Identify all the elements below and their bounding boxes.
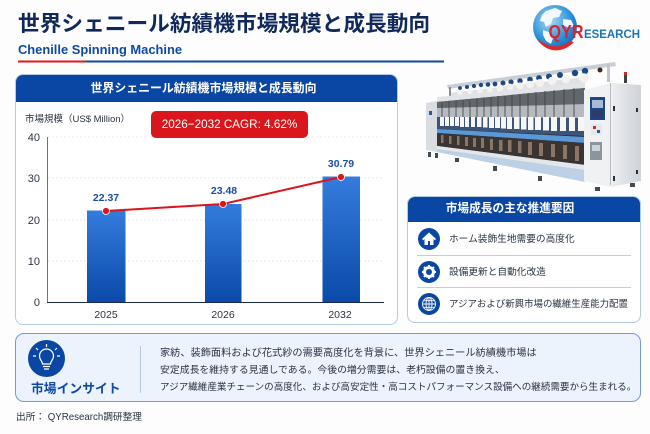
CAGR callout — [151, 111, 308, 138]
top creel — [447, 62, 616, 101]
icon: gear — [418, 261, 440, 283]
panel: market size chart — [15, 74, 398, 325]
year labels: 2025 — [94, 309, 118, 321]
CAGR trend line — [102, 174, 344, 214]
driver: automation — [418, 261, 546, 283]
guide rods — [442, 88, 574, 117]
y axis labels: 30 — [28, 173, 40, 185]
panel: market insight — [15, 333, 641, 402]
bars — [87, 176, 360, 302]
machine body — [437, 83, 585, 182]
y axis labels: 40 — [28, 132, 40, 144]
insight text: アジア繊維産業チェーンの高度化、および高安定性・高コストパフォーマンス設備への継続需要から生まれる。 — [160, 382, 636, 393]
bobbins — [440, 117, 584, 131]
insight heading: 市場インサイト — [31, 381, 121, 396]
logo: QYResearch: ESEARCH — [584, 29, 640, 41]
left end cabinet — [426, 101, 437, 152]
icon: home — [418, 228, 440, 250]
driver: emerging markets: アジアおよび新興市場の繊維生産能力配置 — [449, 299, 628, 310]
value labels — [93, 158, 354, 204]
y axis labels — [28, 132, 40, 309]
value labels: 30.79 — [328, 158, 354, 170]
title: 世界シェニール紡績機市場規模と成長動向 — [18, 11, 430, 36]
value labels: 23.48 — [211, 185, 237, 197]
axis title: 市場規模（US$ Million） — [25, 114, 130, 125]
CAGR callout: 2026−2032 CAGR: 4.62% — [162, 118, 297, 131]
logo: QYResearch — [533, 5, 640, 50]
icon: globe — [418, 293, 440, 315]
insight text — [160, 347, 636, 393]
icon: light bulb — [28, 340, 65, 377]
drivers heading — [408, 197, 640, 222]
y axis labels: 0 — [34, 297, 40, 309]
year labels — [94, 309, 352, 321]
driver: home textiles: ホーム装飾生地需要の高度化 — [449, 234, 575, 245]
insight text: 家紡、装飾面料および花式紗の需要高度化を背景に、世界シェニール紡績機市場は — [160, 348, 537, 359]
panel: growth drivers — [407, 196, 641, 323]
chart panel heading — [16, 75, 397, 102]
y axis labels: 10 — [28, 256, 40, 268]
insight text: 安定成長を維持する見通しである。今後の増分需要は、老朽設備の置き換え、 — [160, 365, 505, 376]
driver: emerging markets — [418, 293, 628, 315]
driver: home textiles — [418, 228, 575, 250]
title underline — [18, 60, 444, 62]
subtitle: Chenille Spinning Machine — [18, 42, 182, 57]
chart panel heading: 世界シェニール紡績機市場規模と成長動向 — [91, 81, 316, 95]
lower spindles — [441, 135, 579, 161]
y axis labels: 20 — [28, 215, 40, 227]
value labels: 22.37 — [93, 192, 119, 204]
image: chenille spinning machine — [426, 62, 641, 191]
right control cabinet — [584, 72, 641, 187]
drivers heading: 市場成長の主な推進要因 — [446, 202, 574, 215]
source note: 出所： QYResearch調研整理 — [16, 412, 142, 423]
year labels: 2026 — [211, 309, 235, 321]
bar chart — [28, 132, 384, 321]
year labels: 2032 — [328, 309, 352, 321]
driver: automation: 設備更新と自動化改造 — [449, 267, 546, 278]
feet — [428, 152, 635, 191]
logo: QYResearch: QYR — [548, 22, 584, 42]
